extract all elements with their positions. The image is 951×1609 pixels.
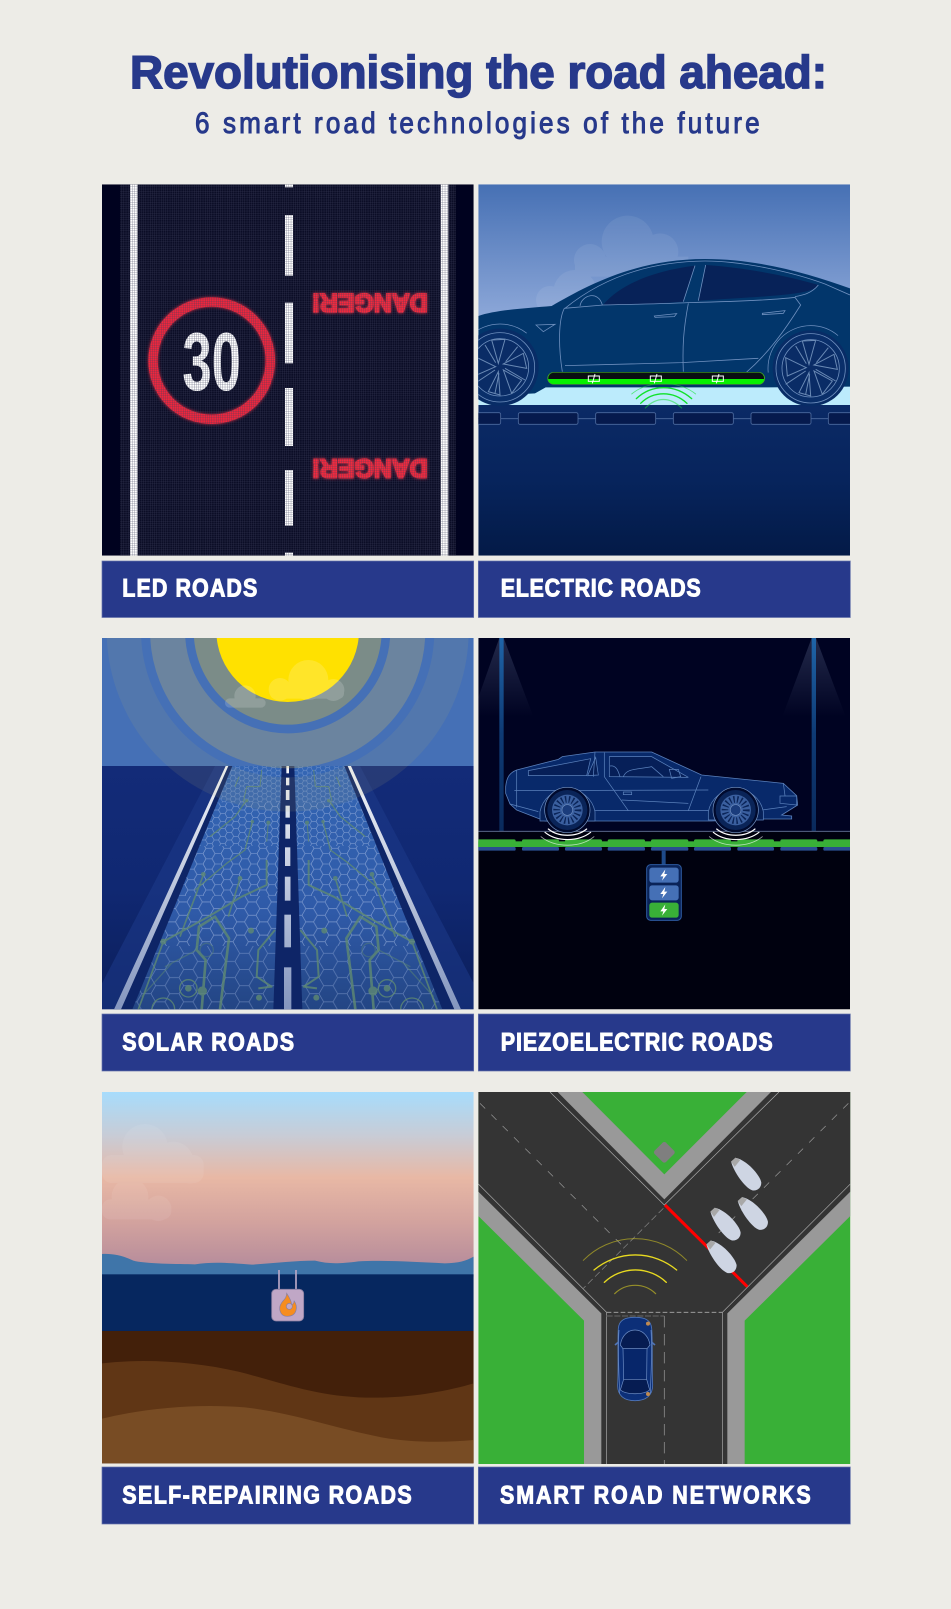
panel: solar roads [102, 638, 474, 1072]
clouds [536, 216, 688, 314]
connected car [615, 1317, 655, 1401]
illustration: smart road junction [478, 1092, 850, 1464]
road markings [478, 1092, 850, 1464]
clouds [102, 1124, 204, 1221]
danger warning bottom: DANGER! [312, 453, 428, 483]
label [478, 1014, 850, 1071]
signal arcs [583, 1239, 687, 1294]
lane markings [130, 184, 448, 556]
centre dashes [284, 766, 291, 1009]
label [478, 1467, 850, 1524]
hills [102, 1254, 474, 1277]
label [478, 561, 850, 618]
panel: LED roads [102, 184, 474, 617]
car [457, 259, 853, 411]
earth layers [102, 1331, 474, 1463]
asphalt [478, 1092, 850, 1464]
illustration: piezoelectric road [478, 638, 850, 1010]
road cross-section [102, 1274, 474, 1331]
label: SMART ROAD NETWORKS [500, 1481, 811, 1509]
solar panels [132, 766, 442, 1010]
subtitle: 6 smart road technologies of the future [195, 106, 760, 139]
white edge lines [114, 766, 461, 1009]
illustration: self-repairing road [102, 1092, 474, 1464]
charging waves [632, 383, 696, 408]
sun [216, 559, 359, 702]
road surface [114, 766, 461, 1009]
label: SELF-REPAIRING ROADS [122, 1481, 412, 1509]
clouds [225, 660, 344, 708]
label: LED ROADS [122, 574, 257, 602]
street lights [472, 638, 846, 831]
label [102, 1467, 474, 1524]
speed limit sign [153, 302, 270, 419]
traffic island marker [653, 1141, 676, 1164]
road top line [478, 830, 850, 833]
panel: self-repairing roads [102, 1092, 474, 1524]
battery charging bar [548, 372, 765, 384]
pavement [478, 1092, 850, 1464]
red stop line [665, 1205, 747, 1287]
road slabs [472, 413, 858, 424]
label: ELECTRIC ROADS [501, 574, 701, 602]
sun halo rings [124, 467, 452, 794]
label: PIEZOELECTRIC ROADS [501, 1028, 773, 1056]
label [102, 1014, 474, 1071]
speed limit sign: 30 [182, 315, 241, 408]
label: SOLAR ROADS [122, 1028, 294, 1056]
illustration: solar road [102, 638, 474, 1010]
illustration: electric road [478, 184, 850, 556]
sports car [506, 752, 798, 833]
pressure waves [541, 829, 762, 845]
battery stack [647, 851, 681, 920]
danger warning top: DANGER! [312, 288, 428, 318]
panel: piezoelectric roads [472, 638, 857, 1071]
healing capsule [272, 1270, 304, 1321]
title: Revolutionising the road ahead: [130, 46, 827, 98]
panel: smart road networks [478, 1092, 850, 1524]
light rays beside road [102, 766, 474, 1009]
label [102, 561, 474, 618]
illustration: LED road [102, 184, 474, 556]
panel: electric roads [457, 184, 858, 617]
waiting cars [702, 1154, 772, 1277]
piezo slabs [472, 839, 857, 851]
